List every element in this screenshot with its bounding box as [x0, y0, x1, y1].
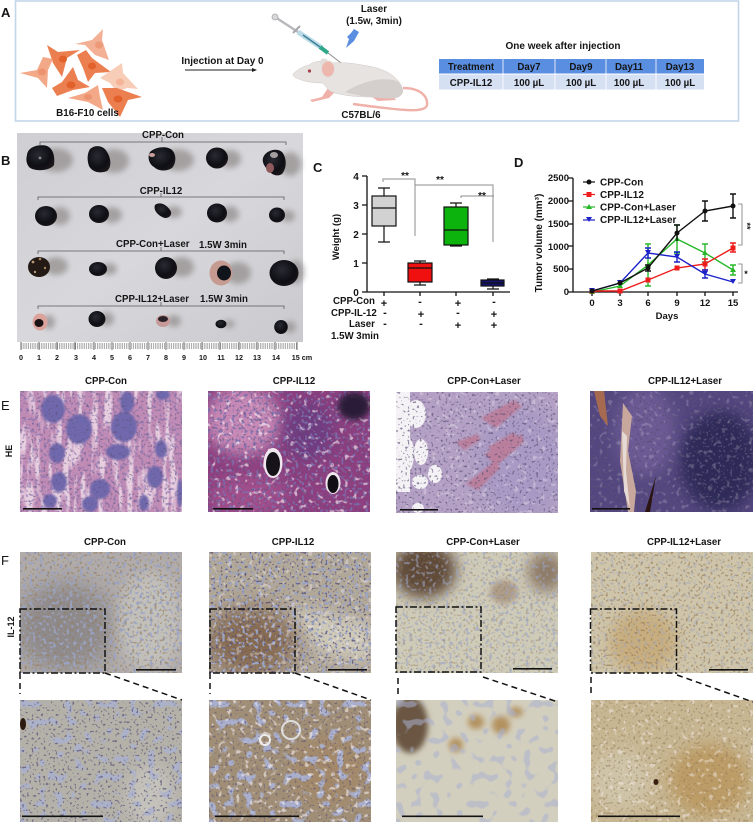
significance markers: ** — [742, 222, 752, 230]
IHC image: CPP-Con+Laser zoom — [396, 700, 558, 822]
group labels: 1.5W 3min — [200, 294, 248, 305]
row label IL-12: IL-12 — [6, 616, 16, 638]
scale bar — [22, 816, 103, 817]
volume axes: 12 — [700, 298, 710, 309]
volume axes: 0 — [564, 287, 569, 298]
series: CPP-IL12 — [590, 243, 736, 294]
volume axes: 0 — [589, 298, 595, 309]
icon: syringe — [272, 14, 345, 66]
legend: CPP-IL12 — [600, 190, 644, 201]
dosing table: Day11 — [615, 62, 644, 73]
box: CPP-IL12 — [408, 261, 432, 285]
panel A frame — [16, 1, 738, 121]
panel letter E: E — [1, 398, 10, 413]
panel E: HE staining — [1, 376, 753, 518]
scale bar — [592, 508, 630, 510]
IHC image: CPP-IL12 overview — [209, 552, 371, 673]
titles: CPP-Con — [85, 376, 127, 387]
group brackets — [38, 137, 286, 309]
box: CPP-Con+Laser — [444, 203, 468, 246]
significance brackets: ** — [401, 171, 409, 182]
volume axes: 500 — [553, 264, 569, 275]
tumors row 2: CPP-IL12 — [35, 203, 285, 226]
scale bar — [400, 509, 438, 511]
panel letter F: F — [1, 553, 9, 568]
weight axis: Weight (g) — [331, 214, 342, 260]
ruler: 5 — [110, 353, 114, 362]
HE image: CPP-IL12+Laser — [590, 391, 753, 512]
ruler: 11 — [217, 353, 225, 362]
titles: CPP-Con+Laser — [446, 537, 520, 548]
scale bar — [513, 668, 552, 670]
treatment grid: - — [419, 318, 423, 330]
legend: CPP-IL12+Laser — [600, 215, 677, 226]
photo background — [17, 133, 303, 342]
panel A: experimental design — [1, 1, 738, 121]
ruler: 6 — [128, 353, 132, 362]
significance brackets — [383, 171, 494, 242]
scale bar — [402, 816, 483, 817]
volume axes: 2000 — [548, 196, 569, 207]
IHC image: CPP-IL12+Laser zoom — [591, 700, 753, 822]
treatment grid: - — [383, 318, 387, 330]
dosing table: 100 µL — [614, 78, 644, 89]
titles: CPP-Con — [84, 537, 126, 548]
volume axes: 1500 — [548, 219, 569, 230]
label: laser: (1.5w, 3min) — [346, 16, 402, 27]
arrow: injection: Injection at Day 0 — [181, 56, 264, 67]
arrow: injection — [181, 56, 264, 72]
treatment grid: + — [491, 309, 497, 321]
label: B16-F10 cells: B16-F10 cells — [56, 108, 119, 119]
scale bar — [23, 508, 62, 510]
panel letter A: A — [1, 5, 11, 20]
ruler: 8 — [164, 353, 168, 362]
significance brackets: ** — [436, 175, 444, 186]
dosing table: 100 µL — [566, 78, 596, 89]
tumor highlights — [32, 152, 278, 273]
table title: One week after injection — [505, 41, 621, 52]
legend: CPP-Con+Laser — [600, 202, 676, 214]
weight axis: 4 — [353, 172, 359, 183]
titles — [85, 376, 722, 387]
legend — [583, 178, 677, 226]
group labels: CPP-IL12 — [140, 186, 182, 197]
dosing table: 100 µL — [665, 78, 695, 89]
significance markers — [738, 204, 752, 283]
IHC image: CPP-IL12+Laser overview — [591, 552, 753, 673]
tumors row 3: CPP-Con+Laser — [28, 257, 298, 286]
group labels: CPP-IL12+Laser — [115, 294, 189, 305]
icon: mouse — [293, 58, 427, 110]
series: CPP-Con — [590, 194, 736, 294]
ruler — [19, 342, 312, 362]
HE image: CPP-Con — [20, 391, 182, 512]
ruler: 15 cm — [292, 353, 312, 362]
scale bar — [213, 508, 253, 510]
volume axes: Tumor volume (mm³) — [534, 194, 545, 292]
ruler: 9 — [182, 353, 186, 362]
treatment grid: Laser — [349, 319, 375, 330]
titles: CPP-IL12+Laser — [648, 376, 722, 387]
scale bar — [215, 816, 299, 817]
treatment grid: - — [383, 307, 387, 319]
volume axes: Days — [656, 311, 678, 322]
ruler: 7 — [146, 353, 150, 362]
ruler: 2 — [55, 353, 59, 362]
label: laser — [346, 4, 402, 27]
panel B: excised tumor photo — [1, 130, 312, 362]
treatment grid: + — [455, 320, 461, 332]
series: CPP-IL12+Laser — [589, 248, 736, 293]
tumors row 1: CPP-Con — [26, 145, 286, 175]
significance brackets: ** — [478, 191, 486, 202]
IHC image: CPP-Con zoom — [20, 700, 182, 822]
weight axis: 3 — [353, 201, 359, 212]
HE image: CPP-Con+Laser — [396, 392, 558, 513]
ruler: 13 — [253, 353, 261, 362]
treatment grid: - — [418, 296, 422, 308]
icon: B16-F10 cells — [20, 29, 142, 117]
ruler: 14 — [272, 353, 280, 362]
treatment grid — [331, 296, 497, 342]
dosing table: Day9 — [569, 62, 593, 73]
weight axis: 0 — [353, 288, 359, 299]
panel letter B: B — [1, 153, 10, 168]
tumor shadows — [39, 148, 304, 333]
titles: CPP-Con+Laser — [447, 376, 521, 387]
series: CPP-Con+Laser — [589, 225, 736, 294]
weight axis — [331, 172, 510, 299]
ruler: 12 — [235, 353, 243, 362]
volume axes — [534, 173, 739, 322]
group labels — [115, 130, 248, 305]
dosing table: Treatment — [448, 62, 495, 73]
panel D: tumor volume line chart — [514, 155, 752, 322]
significance markers: * — [744, 269, 748, 279]
dosing table: CPP-IL12 — [450, 78, 492, 89]
HE image: CPP-IL12 — [208, 391, 370, 512]
volume axes: 6 — [645, 298, 651, 309]
icon: laser bolt — [346, 29, 359, 48]
treatment grid: + — [381, 298, 387, 310]
scale bar — [328, 669, 367, 671]
panel letter C: C — [313, 160, 323, 175]
volume axes: 15 — [728, 298, 739, 309]
treatment grid: 1.5W 3min — [331, 331, 379, 342]
group labels: 1.5W 3min — [199, 240, 247, 251]
IHC image: CPP-Con overview — [20, 552, 182, 673]
row label HE: HE — [4, 445, 14, 457]
box: CPP-Con — [372, 188, 396, 242]
scale bar — [709, 669, 748, 671]
titles: CPP-IL12 — [272, 537, 314, 548]
titles — [84, 537, 721, 548]
weight axis: 2 — [353, 230, 359, 241]
box: CPP-IL12+Laser — [481, 279, 504, 289]
legend: CPP-Con — [600, 178, 643, 188]
group labels: CPP-Con — [142, 130, 184, 141]
dosing table: 100 µL — [514, 78, 544, 89]
treatment grid: CPP-Con — [333, 296, 375, 307]
ruler: 3 — [74, 353, 78, 362]
tumors row 4: CPP-IL12+Laser — [32, 311, 288, 334]
panel F: IL-12 immunostaining — [1, 537, 753, 823]
treatment grid: - — [492, 296, 496, 308]
titles: CPP-IL12 — [273, 376, 315, 387]
IHC image: CPP-IL12 zoom — [209, 700, 371, 822]
label: laser: Laser — [361, 4, 387, 15]
scale bar — [136, 669, 176, 671]
panel letter D: D — [514, 155, 523, 170]
panel C: tumor weight box plot — [313, 160, 510, 342]
volume axes: 9 — [674, 298, 680, 309]
dosing table: Day7 — [517, 62, 541, 73]
inset boxes and zoom connectors — [20, 607, 753, 702]
titles: CPP-IL12+Laser — [647, 537, 721, 548]
volume axes: 3 — [617, 298, 623, 309]
treatment grid: - — [456, 307, 460, 319]
weight axis: 1 — [353, 259, 359, 270]
treatment grid: + — [455, 298, 461, 310]
ruler: 0 — [19, 353, 23, 362]
dosing table — [439, 59, 704, 90]
label: C57BL/6: C57BL/6 — [341, 110, 381, 121]
dosing table: Day13 — [666, 62, 695, 73]
IHC image: CPP-Con+Laser overview — [396, 552, 558, 673]
volume axes: 2500 — [548, 173, 569, 184]
ruler: 10 — [199, 353, 207, 362]
ruler: 4 — [92, 353, 96, 362]
volume axes: 1000 — [548, 242, 569, 253]
ruler: 1 — [37, 353, 41, 362]
scale bar — [598, 816, 680, 817]
treatment grid: CPP-IL-12 — [331, 308, 377, 319]
treatment grid: + — [418, 309, 424, 321]
treatment grid: + — [491, 320, 497, 332]
group labels: CPP-Con+Laser — [116, 239, 190, 250]
